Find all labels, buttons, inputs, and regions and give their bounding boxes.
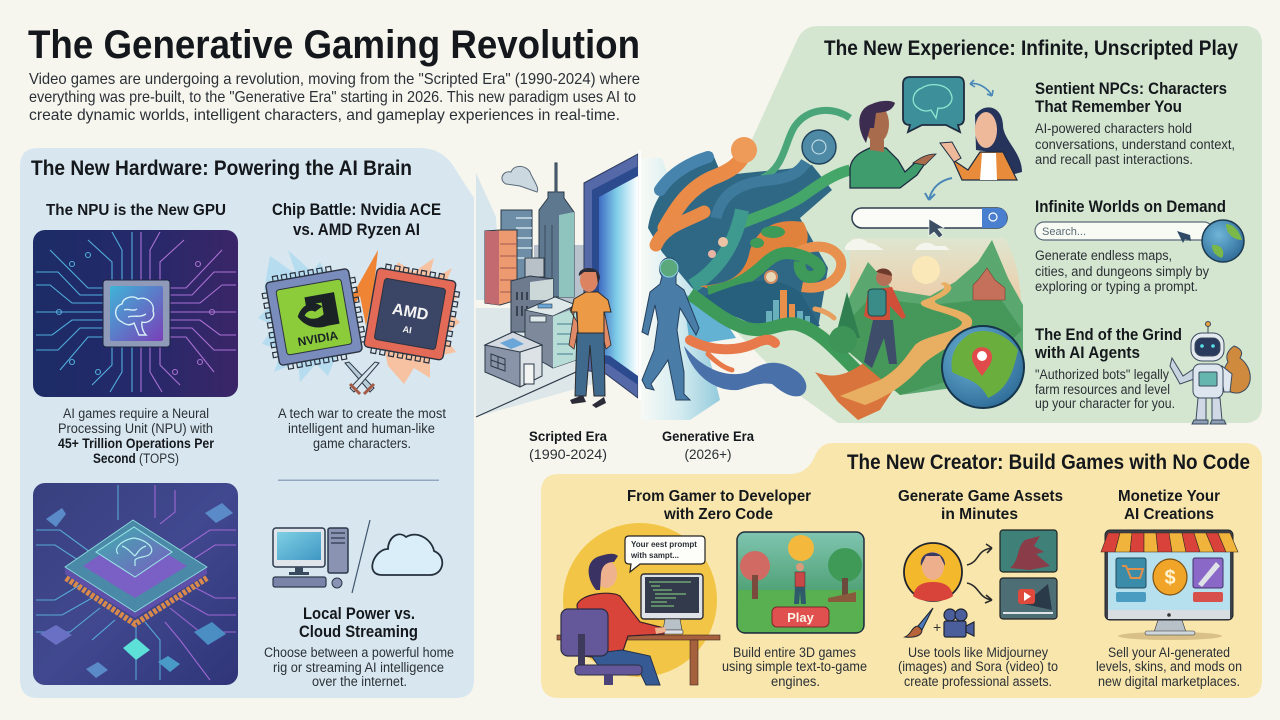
text: infinite worlds bbox=[1035, 248, 1209, 294]
intro text block: everything was pre-built, to the "Generative Era" starting in 2026. This new paradigm uses AI to bbox=[29, 89, 636, 106]
illustration: landscape with hiker bbox=[829, 238, 1024, 408]
tower bbox=[539, 163, 574, 297]
text: gamer description: Build entire 3D games bbox=[733, 645, 856, 660]
text: NPU description bbox=[58, 406, 215, 466]
orange spiral bbox=[798, 247, 841, 288]
illustration: chip battle bbox=[258, 250, 462, 394]
heading: from gamer to developer bbox=[627, 488, 811, 523]
bottom blue blob bbox=[684, 346, 806, 396]
gray block bbox=[511, 276, 553, 332]
text: end of the grind: "Authorized bots" legally bbox=[1035, 367, 1169, 382]
awning bbox=[1101, 533, 1238, 552]
gear circle bbox=[802, 130, 836, 164]
heading: chip battle: vs. AMD Ryzen AI bbox=[293, 221, 420, 239]
orange lower top band bbox=[656, 212, 704, 245]
text: sentient NPCs: AI-powered characters hold bbox=[1035, 121, 1192, 136]
office tall bbox=[501, 210, 532, 280]
dark swirl base bbox=[648, 152, 832, 330]
illustration: marketplace monitor: $ bbox=[1164, 567, 1176, 589]
intro text block: Video games are undergoing a revolution, moving from the "Scripted Era" (1990-2024) where bbox=[29, 71, 640, 88]
chip: AMD bbox=[363, 263, 462, 366]
bottom green band bbox=[690, 294, 858, 372]
intro text block bbox=[29, 71, 640, 124]
man NPC bbox=[850, 147, 926, 188]
heading: from gamer to developer: From Gamer to Developer bbox=[627, 488, 811, 505]
green arc bbox=[762, 110, 850, 178]
icon: cloud bbox=[372, 534, 442, 575]
illustration: game scene with play button bbox=[737, 532, 864, 633]
back block bbox=[534, 245, 584, 305]
text: end of the grind: farm resources and level bbox=[1035, 382, 1170, 397]
icon: creator avatar bbox=[904, 543, 962, 601]
yellow circle bbox=[563, 523, 717, 677]
arrow: conversation bbox=[970, 80, 993, 96]
top blue band bbox=[660, 157, 708, 190]
icon: brain bbox=[116, 297, 154, 335]
monitor bbox=[641, 574, 703, 619]
teal building bbox=[525, 297, 576, 368]
button: play bbox=[772, 607, 829, 627]
data bars bbox=[766, 290, 810, 326]
text: chip battle description: A tech war to create the most bbox=[278, 406, 446, 421]
text: NPU description: Second (TOPS) bbox=[93, 451, 179, 466]
text: NPU description: 45+ Trillion Operations Per bbox=[58, 436, 215, 451]
illustration: gamer at desk: Your eest prompt bbox=[631, 539, 697, 549]
panel: new hardware background bbox=[20, 148, 474, 698]
title: The Generative Gaming Revolution bbox=[28, 23, 640, 67]
heading: end of the grind bbox=[1034, 325, 1182, 362]
trees bbox=[835, 292, 860, 338]
text: end of the grind: up your character for you. bbox=[1035, 396, 1175, 411]
plus sign: + bbox=[933, 619, 941, 635]
panel: new creator background bbox=[541, 443, 1262, 698]
heading: chip battle bbox=[272, 201, 441, 239]
text: infinite worlds: exploring or typing a prompt. bbox=[1035, 279, 1198, 294]
text: sentient NPCs: conversations, understand context, bbox=[1035, 137, 1235, 152]
bottom orange band bbox=[690, 340, 775, 349]
text: gamer description: using simple text-to-game bbox=[722, 659, 867, 674]
heading: end of the grind: with AI Agents bbox=[1034, 343, 1140, 362]
search bar with globe: Search... bbox=[1042, 226, 1086, 238]
sun bbox=[912, 256, 940, 284]
illustration: gamer at desk bbox=[557, 523, 720, 685]
teal green wide band bbox=[692, 210, 742, 286]
heading: generate game assets: Generate Game Assets bbox=[898, 488, 1063, 505]
text: NPU description: Processing Unit (NPU) with bbox=[58, 421, 213, 436]
intro text block: create dynamic worlds, intelligent characters, and gameplay experiences in real-time. bbox=[29, 107, 620, 124]
coin bbox=[1153, 559, 1187, 595]
text: local vs cloud description: rig or streaming AI intelligence bbox=[273, 660, 444, 675]
gray cube bbox=[525, 258, 544, 277]
temple bbox=[973, 268, 1005, 300]
green wave bbox=[708, 253, 820, 292]
text: local vs cloud description bbox=[264, 645, 454, 689]
heading: monetize bbox=[1118, 488, 1220, 523]
image: dragon bbox=[1000, 530, 1057, 572]
illustration: game scene with play button: Play bbox=[787, 610, 815, 625]
label: scripted era bbox=[529, 428, 607, 462]
small orange blob bbox=[815, 309, 834, 318]
woman NPC bbox=[975, 107, 1022, 178]
ground bbox=[476, 308, 600, 417]
starburst: blue side bbox=[258, 250, 340, 382]
heading: local vs cloud: Local Power vs. bbox=[303, 604, 415, 623]
text: local vs cloud description: over the internet. bbox=[312, 674, 407, 689]
arrow: to search bbox=[925, 178, 952, 200]
image: isometric AI chip bbox=[33, 483, 238, 685]
small house bbox=[485, 332, 542, 387]
heading: local vs cloud: Cloud Streaming bbox=[299, 622, 418, 641]
green band two bbox=[735, 170, 850, 226]
heading: end of the grind: The End of the Grind bbox=[1035, 325, 1182, 344]
text: assets description: create professional assets. bbox=[904, 674, 1052, 689]
cursor bbox=[929, 219, 944, 238]
search bar: main bbox=[852, 208, 1007, 238]
cloud bbox=[502, 166, 538, 192]
illustration: scripted era city and portal bbox=[476, 154, 638, 417]
heading: sentient NPCs bbox=[1035, 79, 1227, 116]
desk bbox=[557, 635, 720, 640]
icon: robot with sack bbox=[1170, 322, 1250, 424]
person: scripted bbox=[569, 268, 611, 408]
icon: desktop computer bbox=[273, 528, 348, 588]
text: assets description: (images) and Sora (video) to bbox=[898, 659, 1058, 674]
person body bbox=[577, 593, 664, 660]
text: infinite worlds: Generate endless maps, bbox=[1035, 248, 1172, 263]
map pin bbox=[972, 347, 992, 376]
text: monetize description: levels, skins, and mods on bbox=[1096, 659, 1242, 674]
text: infinite worlds: cities, and dungeons simply by bbox=[1035, 264, 1209, 279]
speech bubble bbox=[625, 536, 705, 572]
orange tail bbox=[815, 358, 905, 420]
mid blue band bbox=[716, 162, 806, 218]
illustration: gamer at desk: with sampt... bbox=[630, 550, 679, 560]
icon: brain glow bbox=[117, 538, 152, 566]
person: generative figure bbox=[642, 258, 699, 400]
glow node bbox=[765, 271, 777, 283]
chip pins bbox=[66, 578, 207, 624]
heading: infinite worlds: Infinite Worlds on Demand bbox=[1035, 197, 1226, 216]
mountains bbox=[840, 240, 1023, 395]
light blue ripple bbox=[683, 295, 736, 345]
text: end of the grind bbox=[1035, 367, 1175, 411]
chip: AMD: AMD bbox=[391, 301, 430, 324]
heading: generate game assets bbox=[898, 488, 1063, 523]
heading: new hardware: The New Hardware: Powering the AI Brain bbox=[31, 157, 412, 180]
panel: new experience background bbox=[715, 26, 1262, 423]
text: gamer description: engines. bbox=[771, 674, 820, 689]
text: gamer description bbox=[722, 645, 867, 689]
heading: from gamer to developer: with Zero Code bbox=[663, 506, 773, 523]
red building bbox=[485, 230, 517, 305]
text: NPU description: AI games require a Neural bbox=[63, 406, 209, 421]
text: sentient NPCs: and recall past interactions. bbox=[1035, 152, 1193, 167]
text: monetize description bbox=[1096, 645, 1242, 689]
illustration: marketplace monitor bbox=[1101, 530, 1238, 640]
clouds bbox=[845, 239, 950, 250]
small chips bbox=[46, 508, 66, 527]
search bar with globe bbox=[1035, 220, 1244, 262]
label: scripted era: (1990-2024) bbox=[529, 446, 607, 462]
portal frame bbox=[584, 154, 638, 398]
tile: cart bbox=[1116, 558, 1146, 588]
heading: generate game assets: in Minutes bbox=[941, 506, 1018, 523]
text: assets description: Use tools like Midjourney bbox=[908, 645, 1048, 660]
label: scripted era: Scripted Era bbox=[529, 428, 607, 444]
text: assets description bbox=[898, 645, 1058, 689]
lightning bolt bbox=[340, 250, 378, 326]
label: generative era bbox=[662, 428, 754, 462]
orange band bbox=[665, 148, 746, 228]
heading: local vs cloud bbox=[299, 604, 418, 641]
text: chip battle description: game characters. bbox=[313, 436, 411, 451]
heading: chip battle: Chip Battle: Nvidia ACE bbox=[272, 201, 441, 219]
text: chip battle description bbox=[278, 406, 446, 451]
winding road bbox=[840, 282, 972, 405]
wall wedge bbox=[476, 173, 500, 300]
chip: NVIDIA: NVIDIA bbox=[297, 328, 339, 349]
chair bbox=[561, 609, 608, 656]
chip: AMD: AI bbox=[402, 324, 413, 335]
sky bbox=[850, 238, 1021, 340]
image: NPU circuit chip bbox=[33, 230, 238, 397]
icon: paintbrush bbox=[905, 608, 933, 637]
label: generative era: (2026+) bbox=[684, 446, 732, 462]
globe bbox=[942, 326, 1024, 408]
heading: sentient NPCs: Sentient NPCs: Characters bbox=[1035, 79, 1227, 98]
label: generative era: Generative Era bbox=[662, 428, 754, 444]
heading: sentient NPCs: That Remember You bbox=[1035, 97, 1182, 116]
chip: NVIDIA bbox=[260, 263, 368, 371]
tree tops on island bbox=[761, 226, 785, 238]
head bbox=[595, 560, 617, 588]
heading: new experience: The New Experience: Infinite, Unscripted Play bbox=[824, 37, 1238, 60]
text: local vs cloud description: Choose between a powerful home bbox=[264, 645, 454, 660]
arrows: to assets bbox=[967, 544, 992, 603]
text: monetize description: new digital marketplaces. bbox=[1098, 674, 1240, 689]
hiker bbox=[864, 269, 906, 368]
tile: pencil bbox=[1193, 558, 1223, 588]
starburst: orange side bbox=[380, 258, 460, 384]
text: sentient NPCs bbox=[1035, 121, 1235, 167]
heading: monetize: Monetize Your bbox=[1118, 488, 1220, 505]
text: chip battle description: intelligent and human-like bbox=[288, 421, 435, 436]
heading: NPU: The NPU is the New GPU bbox=[46, 202, 226, 219]
text: monetize description: Sell your AI-generated bbox=[1108, 645, 1230, 660]
illustration: NPC conversation bbox=[850, 77, 1022, 188]
mist bbox=[641, 158, 720, 420]
speech bubble brain bbox=[903, 77, 964, 132]
dark lower pocket bbox=[700, 281, 820, 332]
illustration: generative era swirl bbox=[641, 110, 905, 420]
heading: monetize: AI Creations bbox=[1124, 506, 1214, 523]
icon: movie camera bbox=[944, 609, 974, 637]
icon: crossed swords bbox=[345, 362, 379, 394]
orange island bbox=[700, 221, 808, 292]
image: video bbox=[1000, 578, 1057, 619]
